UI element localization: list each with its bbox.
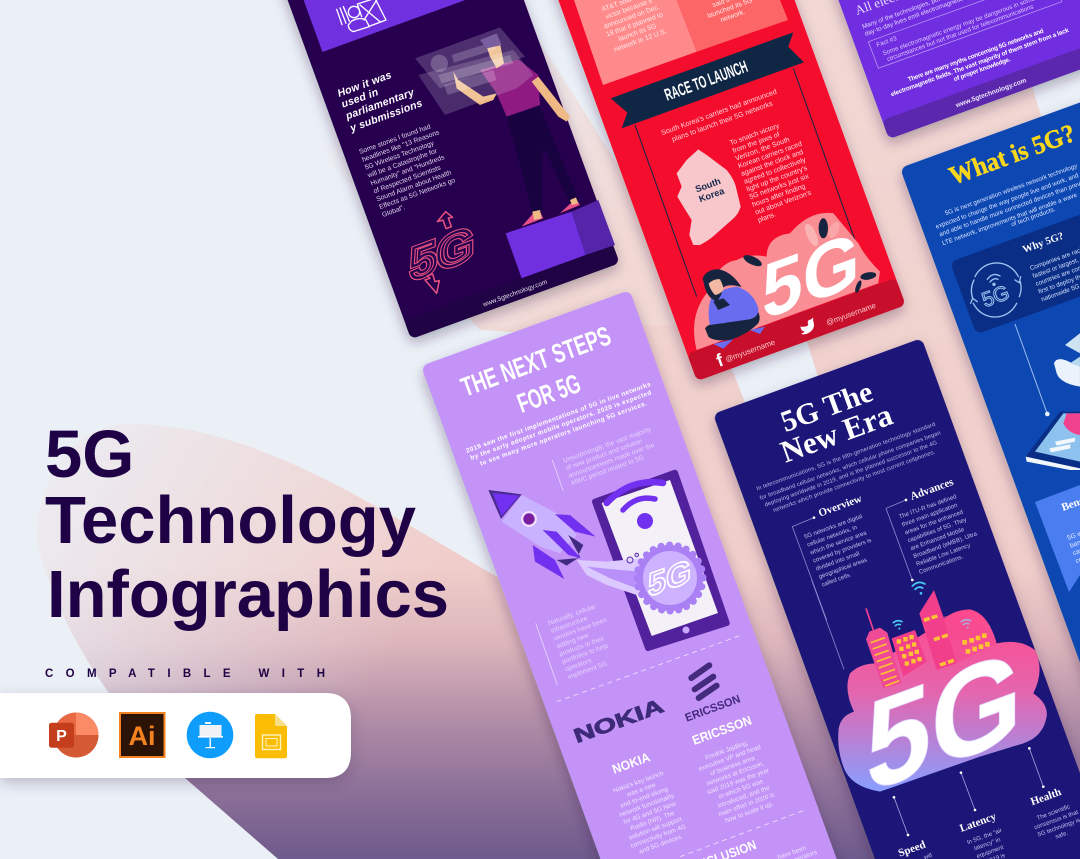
- fact box: circumstances but not that used for telecommunications: [886, 3, 1035, 63]
- race body text: hours after finding: [751, 183, 807, 209]
- heading: how it was used: used in: [340, 86, 380, 111]
- title: THE NEXT STEPS: [457, 321, 615, 402]
- icon: illustrator: [120, 713, 164, 757]
- banner ropes: [635, 68, 855, 297]
- icon: keynote: [187, 712, 233, 758]
- advances section: The ITU-R has defined: [898, 494, 957, 521]
- race body text: out about Verizon's: [754, 189, 813, 217]
- side note bottom: implement 5G.: [567, 660, 610, 681]
- fact box: [868, 0, 1062, 68]
- side note top: [552, 426, 661, 491]
- body text: Global".: [381, 204, 406, 219]
- overview section: Overview: [817, 493, 864, 520]
- icon: person with map: [337, 0, 386, 32]
- ericsson section: said 2019 was the year: [706, 767, 771, 796]
- fact box: Fact #3: [876, 35, 898, 49]
- stat text left: announced on Dec.: [603, 4, 661, 31]
- race body text: 5G networks just six: [749, 173, 810, 201]
- overview section: geographical areas: [818, 557, 868, 581]
- logo: ericsson: [684, 665, 742, 725]
- bold intro text: by the early adopter mobile operators. 2020 is expected: [470, 389, 652, 462]
- overview section: covered by providers is: [812, 538, 872, 565]
- race body text: against the clock and: [740, 149, 805, 178]
- illustration: 5G cloud city: [838, 582, 1047, 792]
- icon: google slides: [255, 714, 287, 758]
- ericsson section: executive VP and head: [698, 744, 762, 773]
- body text: Sound Alarm about Health: [376, 169, 453, 203]
- purple header block: [254, 0, 503, 52]
- why 5G panel: [950, 159, 1080, 334]
- bold intro text: 2019 saw the first implementations of 5G in live networks: [465, 381, 652, 455]
- ericsson section: of business area: [709, 755, 756, 777]
- overview section: 5G networks are digital: [804, 514, 863, 541]
- card: all electromagnetic (violet): [786, 0, 1080, 139]
- advances section: are Enhanced Mobile: [910, 527, 966, 552]
- overview section: [803, 493, 881, 589]
- ericsson section: main effort in 2020 is: [718, 791, 776, 818]
- advances section: Advances: [909, 476, 956, 503]
- intro text: networks which provide connectivity to most current cellphones.: [773, 449, 937, 514]
- race body text: agreed to collectively: [743, 157, 807, 186]
- intro text: for broadband cellular networks, which cellular phone companies began: [759, 430, 942, 502]
- title: FOR 5G: [513, 368, 585, 419]
- nokia section: connectivity from 4G: [630, 823, 687, 850]
- side note bottom: adding new: [556, 632, 590, 650]
- body text: Effects as 5G Networks go: [378, 177, 456, 211]
- stat text left: launch its 5G: [618, 23, 657, 43]
- overview section: called cells.: [821, 572, 853, 589]
- stat text left: network in 12 U.S.: [613, 28, 668, 54]
- intro text: expected to change the way people live and work, and: [935, 172, 1080, 231]
- card: race to launch (red): [519, 0, 906, 381]
- social: facebook: @myusername: [724, 338, 776, 364]
- advances section: [898, 476, 984, 576]
- metric: latency: Latency: [958, 810, 998, 835]
- ericsson section: how to scale it up.: [724, 800, 775, 825]
- side note top: Unsurprisingly, the vast majority: [562, 426, 653, 465]
- card footer band: [404, 244, 620, 339]
- card: 5G the new era (navy): [713, 338, 1080, 859]
- metric: latency: In 5G, the "air: [966, 828, 1003, 846]
- title: Technology: [45, 483, 416, 558]
- nokia section: [610, 749, 690, 858]
- white compatibility pill: [0, 693, 351, 778]
- metric: health: consensus is that: [1034, 810, 1080, 831]
- nokia section: was a new: [625, 781, 657, 799]
- nokia section: end-to-end slicing: [619, 786, 669, 810]
- illustration: girl with 5G and leaves: 5G: [762, 213, 860, 337]
- bold summary: There are many myths concerning 5G networks and: [907, 28, 1045, 84]
- nokia section: Radio (NR). The: [630, 810, 676, 832]
- bold summary: of proper knowledge.: [953, 56, 1012, 83]
- body text: of Respected Scientists: [373, 164, 442, 195]
- race body text: light up the country's: [746, 165, 809, 193]
- heading: how it was used: How it was: [336, 69, 393, 100]
- advances section: capabilities of 5G. They: [907, 517, 968, 544]
- race body text: plans.: [757, 211, 777, 224]
- illustration: 5G cloud burst: 5G: [648, 551, 691, 604]
- metric: health: [1029, 786, 1080, 846]
- illustration: 5G cloud burst: [627, 545, 703, 611]
- ericsson section: Fredrik Jejdling,: [704, 740, 749, 762]
- icon: 5G cycle: [971, 263, 1021, 317]
- body text: Humanity" and "Hundreds: [370, 154, 446, 187]
- social: twitter: [797, 301, 877, 336]
- title: 5G The: [776, 375, 877, 439]
- advances section: three main application: [901, 503, 958, 528]
- nokia section: Nokia's key launch: [612, 770, 665, 795]
- footer url: www.5gtechnology.com: [481, 279, 548, 309]
- intro text: LTE network, improvements that will enable a wave: [941, 192, 1079, 247]
- social: twitter: @myusername: [825, 301, 877, 327]
- metric: health: Health: [1029, 786, 1063, 808]
- salmon stat panel right: [677, 0, 788, 52]
- map label: Korea: [697, 186, 726, 204]
- race body text: from the jaws of: [732, 131, 781, 155]
- metric: health: safe.: [1055, 830, 1069, 841]
- illustration: phone: [1026, 412, 1080, 470]
- metric pointers: [893, 747, 1045, 836]
- title: [457, 321, 615, 419]
- card: the next steps for 5G (lavender): [421, 290, 876, 859]
- map label: South: [694, 176, 722, 194]
- ericsson section: [690, 713, 782, 827]
- violet footer band: [882, 18, 1080, 139]
- nokia section: network functionality: [619, 792, 676, 819]
- illustration: tablet with wifi: [595, 473, 727, 648]
- stat text right: network.: [720, 9, 746, 24]
- heading: how it was used: y submissions: [348, 97, 424, 135]
- map: south korea: [677, 149, 741, 245]
- side note bottom: infrastructure: [550, 615, 589, 635]
- title: Infographics: [47, 557, 449, 632]
- ericsson section: introduced, and the: [717, 784, 771, 810]
- race body text: To snatch victory: [729, 123, 781, 147]
- why 5G text: fastest or largest,: [1032, 257, 1080, 280]
- why 5G heading: Why 5G?: [1021, 231, 1065, 256]
- icon: neon 5G with arrows: 5G: [410, 216, 474, 291]
- metric: health: 5G technology is: [1037, 818, 1080, 839]
- side note bottom: products to their: [559, 635, 606, 658]
- why 5G text: nationwide 5G: [1040, 283, 1080, 303]
- bold summary: electromagnetic fields. The vast majority of them stem from a lack: [890, 27, 1070, 98]
- icon: neon 5G with arrows: 5G: [410, 216, 474, 291]
- connector line: [1015, 324, 1050, 416]
- illustration: rocket: [488, 490, 660, 595]
- social: facebook: f: [714, 350, 727, 371]
- illustration: man with screens on block: [415, 27, 615, 278]
- metric: latency: [958, 810, 1011, 859]
- body text: 5G Wireless Technology: [364, 140, 436, 172]
- illustration: girl with 5G and leaves: [694, 213, 880, 350]
- heading: how it was used: parliamentary: [343, 86, 417, 123]
- body text: Some stories I found had: [358, 123, 432, 156]
- overview section: which the service area: [809, 530, 868, 557]
- race body text: Korean carriers raced: [737, 141, 803, 170]
- side note top: MWC period related to 5G: [570, 454, 645, 487]
- side note top: announcements made over the: [568, 442, 656, 480]
- side note top: of new product and solution: [565, 438, 644, 472]
- card: how it was used (dark purple): [233, 0, 620, 339]
- title: [45, 417, 449, 632]
- footer url: www.5gtechnology.com: [954, 77, 1028, 110]
- intro text: of tech products.: [1010, 206, 1057, 228]
- compatible with label: COMPATIBLE WITH: [45, 668, 325, 680]
- nokia section: and 5G devices.: [638, 833, 684, 855]
- advances section: Communications.: [918, 554, 964, 576]
- stat text left: 18 that it planned to: [605, 11, 664, 39]
- salmon stat panel left: [574, 0, 697, 85]
- nokia section: NOKIA: [610, 749, 653, 777]
- connector lines: [792, 499, 914, 669]
- ericsson section: ERICSSON: [690, 713, 754, 748]
- logo: nokia: NOKIA: [571, 695, 667, 748]
- banner title: RACE TO LAUNCH: [662, 57, 750, 105]
- nokia section: solution will support: [628, 816, 683, 842]
- side note bottom: Naturally, cellular: [547, 603, 598, 627]
- divider dashes: [557, 635, 805, 857]
- icon: 5G cycle: 5G: [979, 281, 1013, 312]
- logo: ericsson: ERICSSON: [684, 693, 742, 725]
- social: facebook: [714, 338, 776, 371]
- advances section: Broadband (eMBB), Ultra: [913, 531, 979, 560]
- intro text: 5G is next generation wireless network technology: [944, 162, 1079, 217]
- intro text: In telecommunications, 5G is the fifth-generation technology standard: [756, 422, 936, 492]
- red footer band: [687, 278, 906, 381]
- benefits panel: [1035, 485, 1080, 592]
- intro text: South Korea's carriers had announced: [660, 87, 778, 137]
- card: what is 5G (blue): [900, 65, 1080, 859]
- title: New Era: [776, 397, 897, 469]
- intro text: plans to launch their 5G networks: [671, 99, 774, 144]
- side note bottom: portfolios to help: [561, 642, 609, 666]
- bold intro text: to see many more operators launching 5G services.: [479, 400, 648, 467]
- body text: headlines like "13 Reasons: [361, 129, 441, 164]
- ericsson section: in which 5G was: [718, 778, 764, 801]
- metric: health: The scientific: [1036, 804, 1071, 822]
- ericsson section: networks at Ericsson,: [706, 760, 765, 788]
- race body text: Verizon, the South: [735, 136, 791, 163]
- icon: illustrator: Ai: [128, 721, 156, 751]
- overview section: cellular networks, in: [807, 525, 858, 549]
- side note bottom: vendors have been: [553, 617, 608, 643]
- body text: will be a Catastrophe for: [366, 148, 439, 180]
- overview section: divided into small: [815, 551, 861, 573]
- advances section: areas for the enhanced: [904, 510, 964, 536]
- big white 5G: 5G: [866, 621, 1022, 821]
- conclusion section: [680, 837, 818, 859]
- side note bottom: [536, 601, 622, 685]
- icon: powerpoint: [49, 712, 98, 758]
- banner: [611, 32, 804, 128]
- nokia section: for 4G and 5G New: [623, 800, 677, 826]
- metric: latency: latency" in: [974, 837, 1001, 852]
- illustration: 3D shape: [1054, 333, 1080, 387]
- title: 5G: [45, 417, 134, 492]
- intro text: deploying worldwide in 2019, and is the planned successor to the 4G: [764, 440, 939, 508]
- icon: powerpoint: P: [56, 728, 67, 745]
- advances section: Reliable Low Latency: [916, 543, 971, 568]
- side note bottom: operators: [564, 657, 593, 673]
